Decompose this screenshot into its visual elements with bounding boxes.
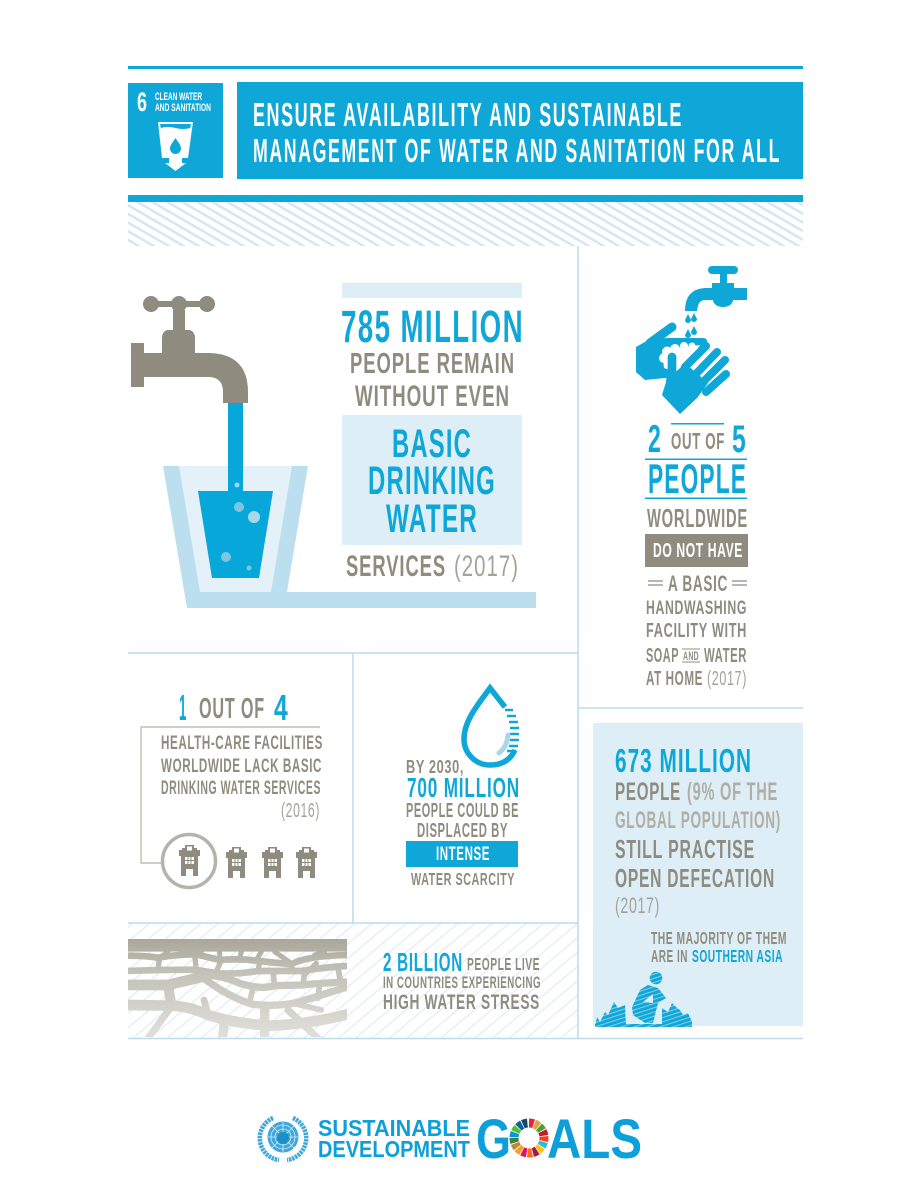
text: handwashing facility: HANDWASHING xyxy=(646,597,747,619)
text: 1 out of 4: 1 xyxy=(179,687,187,728)
text: handwashing facility: FACILITY WITH xyxy=(646,620,747,642)
text: lack of basic drinking water services: WORLDWIDE LACK BASIC xyxy=(161,756,322,777)
goal name xyxy=(155,91,211,114)
label: intense: INTENSE xyxy=(436,844,490,865)
text: southern asia: THE MAJORITY OF THEM xyxy=(651,928,787,948)
wordmark: SUSTAINABLE xyxy=(318,1115,470,1141)
text: southern asia xyxy=(651,928,787,966)
text: 673 million: (9% OF THE xyxy=(687,778,778,806)
goal number: 6 xyxy=(137,87,147,117)
text: 785 million: 785 MILLION xyxy=(341,301,524,352)
text: services 2017: (2017) xyxy=(454,550,519,583)
text: 2 billion, high water stress: PEOPLE LIVE xyxy=(467,954,540,974)
panel: handwashing xyxy=(636,266,748,690)
icon: water drop xyxy=(464,688,519,765)
text: 1 out of 4: 4 xyxy=(274,687,289,728)
label: intense xyxy=(406,841,518,867)
text: 2 out of 5 people xyxy=(645,418,747,502)
highlighted text: basic drinking water xyxy=(342,415,522,545)
text: 2 billion, high water stress xyxy=(383,947,541,1014)
panel: health-care facilities xyxy=(141,687,323,888)
text: 700 million displaced: PEOPLE COULD BE xyxy=(406,800,519,822)
text: handwashing facility xyxy=(646,571,747,690)
text: worldwide: WORLDWIDE xyxy=(647,503,748,533)
panel: water stress xyxy=(126,945,541,1042)
panel: water stress hatch background xyxy=(128,923,578,1038)
goal 6 tile xyxy=(128,83,223,178)
text: handwashing facility: (2017) xyxy=(707,668,747,690)
text: 785 million: PEOPLE REMAIN xyxy=(350,348,515,380)
icon: SDG colour wheel xyxy=(508,1117,550,1159)
header band with hatching xyxy=(128,195,803,246)
goal name: CLEAN WATER xyxy=(155,91,202,103)
text: 673 million: (2017) xyxy=(615,893,660,918)
wordmark: DEVELOPMENT xyxy=(318,1136,470,1162)
text: 700 million displaced: DISPLACED BY xyxy=(417,820,508,842)
text: 700 million displaced: BY 2030, xyxy=(406,757,464,777)
text: 700 million displaced: 700 MILLION xyxy=(407,772,520,803)
highlighted text: basic drinking water: WATER xyxy=(386,497,478,541)
text: handwashing facility: SOAP xyxy=(646,645,679,667)
text: handwashing facility: AND xyxy=(683,649,699,663)
text: southern asia: ARE IN xyxy=(651,946,688,966)
text: handwashing facility: WATER xyxy=(704,645,747,667)
text: handwashing facility: AT HOME xyxy=(646,668,703,690)
wordmark xyxy=(318,1107,642,1170)
logo: sustainable development goals xyxy=(260,1107,642,1170)
text: 1 out of 4: OUT OF xyxy=(199,693,265,725)
text: 785 million xyxy=(341,283,524,413)
wordmark: G xyxy=(476,1107,511,1170)
text: 700 million displaced xyxy=(406,757,520,842)
text: lack of basic drinking water services: (2016) xyxy=(281,800,320,822)
text: 1 out of 4 xyxy=(179,687,289,728)
illustration: cracked earth xyxy=(126,945,355,1042)
title banner xyxy=(237,82,803,179)
icon: hands under tap xyxy=(636,266,747,414)
icon: hospitals, one circled xyxy=(162,834,317,888)
text: 2 out of 5 people: OUT OF xyxy=(671,428,725,454)
text: handwashing facility: A BASIC xyxy=(668,571,728,596)
text: 785 million: WITHOUT EVEN xyxy=(355,380,510,413)
text: lack of basic drinking water services: HEALTH-CARE FACILITIES xyxy=(161,733,323,754)
text: 2 out of 5 people: 5 xyxy=(732,418,747,461)
icon: glass with arrow xyxy=(158,122,193,171)
text: 2 billion, high water stress: IN COUNTRIES EXPERIENCING xyxy=(383,973,541,992)
label: do not have: DO NOT HAVE xyxy=(653,540,743,562)
text: 673 million: GLOBAL POPULATION) xyxy=(615,807,781,834)
highlighted text: basic drinking water: DRINKING xyxy=(368,459,496,503)
text: lack of basic drinking water services xyxy=(161,733,323,822)
goal name: AND SANITATION xyxy=(155,102,211,114)
panel: open defecation xyxy=(593,723,803,1027)
panel: drinking water xyxy=(131,283,536,608)
panel: water scarcity xyxy=(406,688,520,889)
text: 673 million: 673 MILLION xyxy=(615,742,752,779)
text: 673 million: STILL PRACTISE xyxy=(615,834,755,864)
icon: UN emblem xyxy=(260,1118,306,1160)
text: southern asia: SOUTHERN ASIA xyxy=(692,946,783,966)
highlighted text: basic drinking water: BASIC xyxy=(392,422,472,466)
wordmark: ALS xyxy=(547,1107,642,1170)
text: services 2017: SERVICES xyxy=(346,550,446,583)
text: 673 million xyxy=(615,742,781,918)
text: lack of basic drinking water services: DRINKING WATER SERVICES xyxy=(161,778,321,799)
icon: crouching figure in grass xyxy=(595,972,692,1027)
text: 2 billion, high water stress: HIGH WATER STRESS xyxy=(383,991,540,1014)
text: 673 million: OPEN DEFECATION xyxy=(615,863,775,893)
text: 2 billion, high water stress: 2 BILLION xyxy=(383,947,463,977)
text: 2 out of 5 people: 2 xyxy=(648,418,662,461)
text: 2 out of 5 people: PEOPLE xyxy=(648,455,747,502)
text: 673 million: PEOPLE xyxy=(615,778,681,806)
text: water scarcity: WATER SCARCITY xyxy=(411,869,515,889)
label: do not have xyxy=(645,534,748,567)
top rule xyxy=(128,66,803,69)
icon: faucet filling a glass xyxy=(131,296,536,608)
